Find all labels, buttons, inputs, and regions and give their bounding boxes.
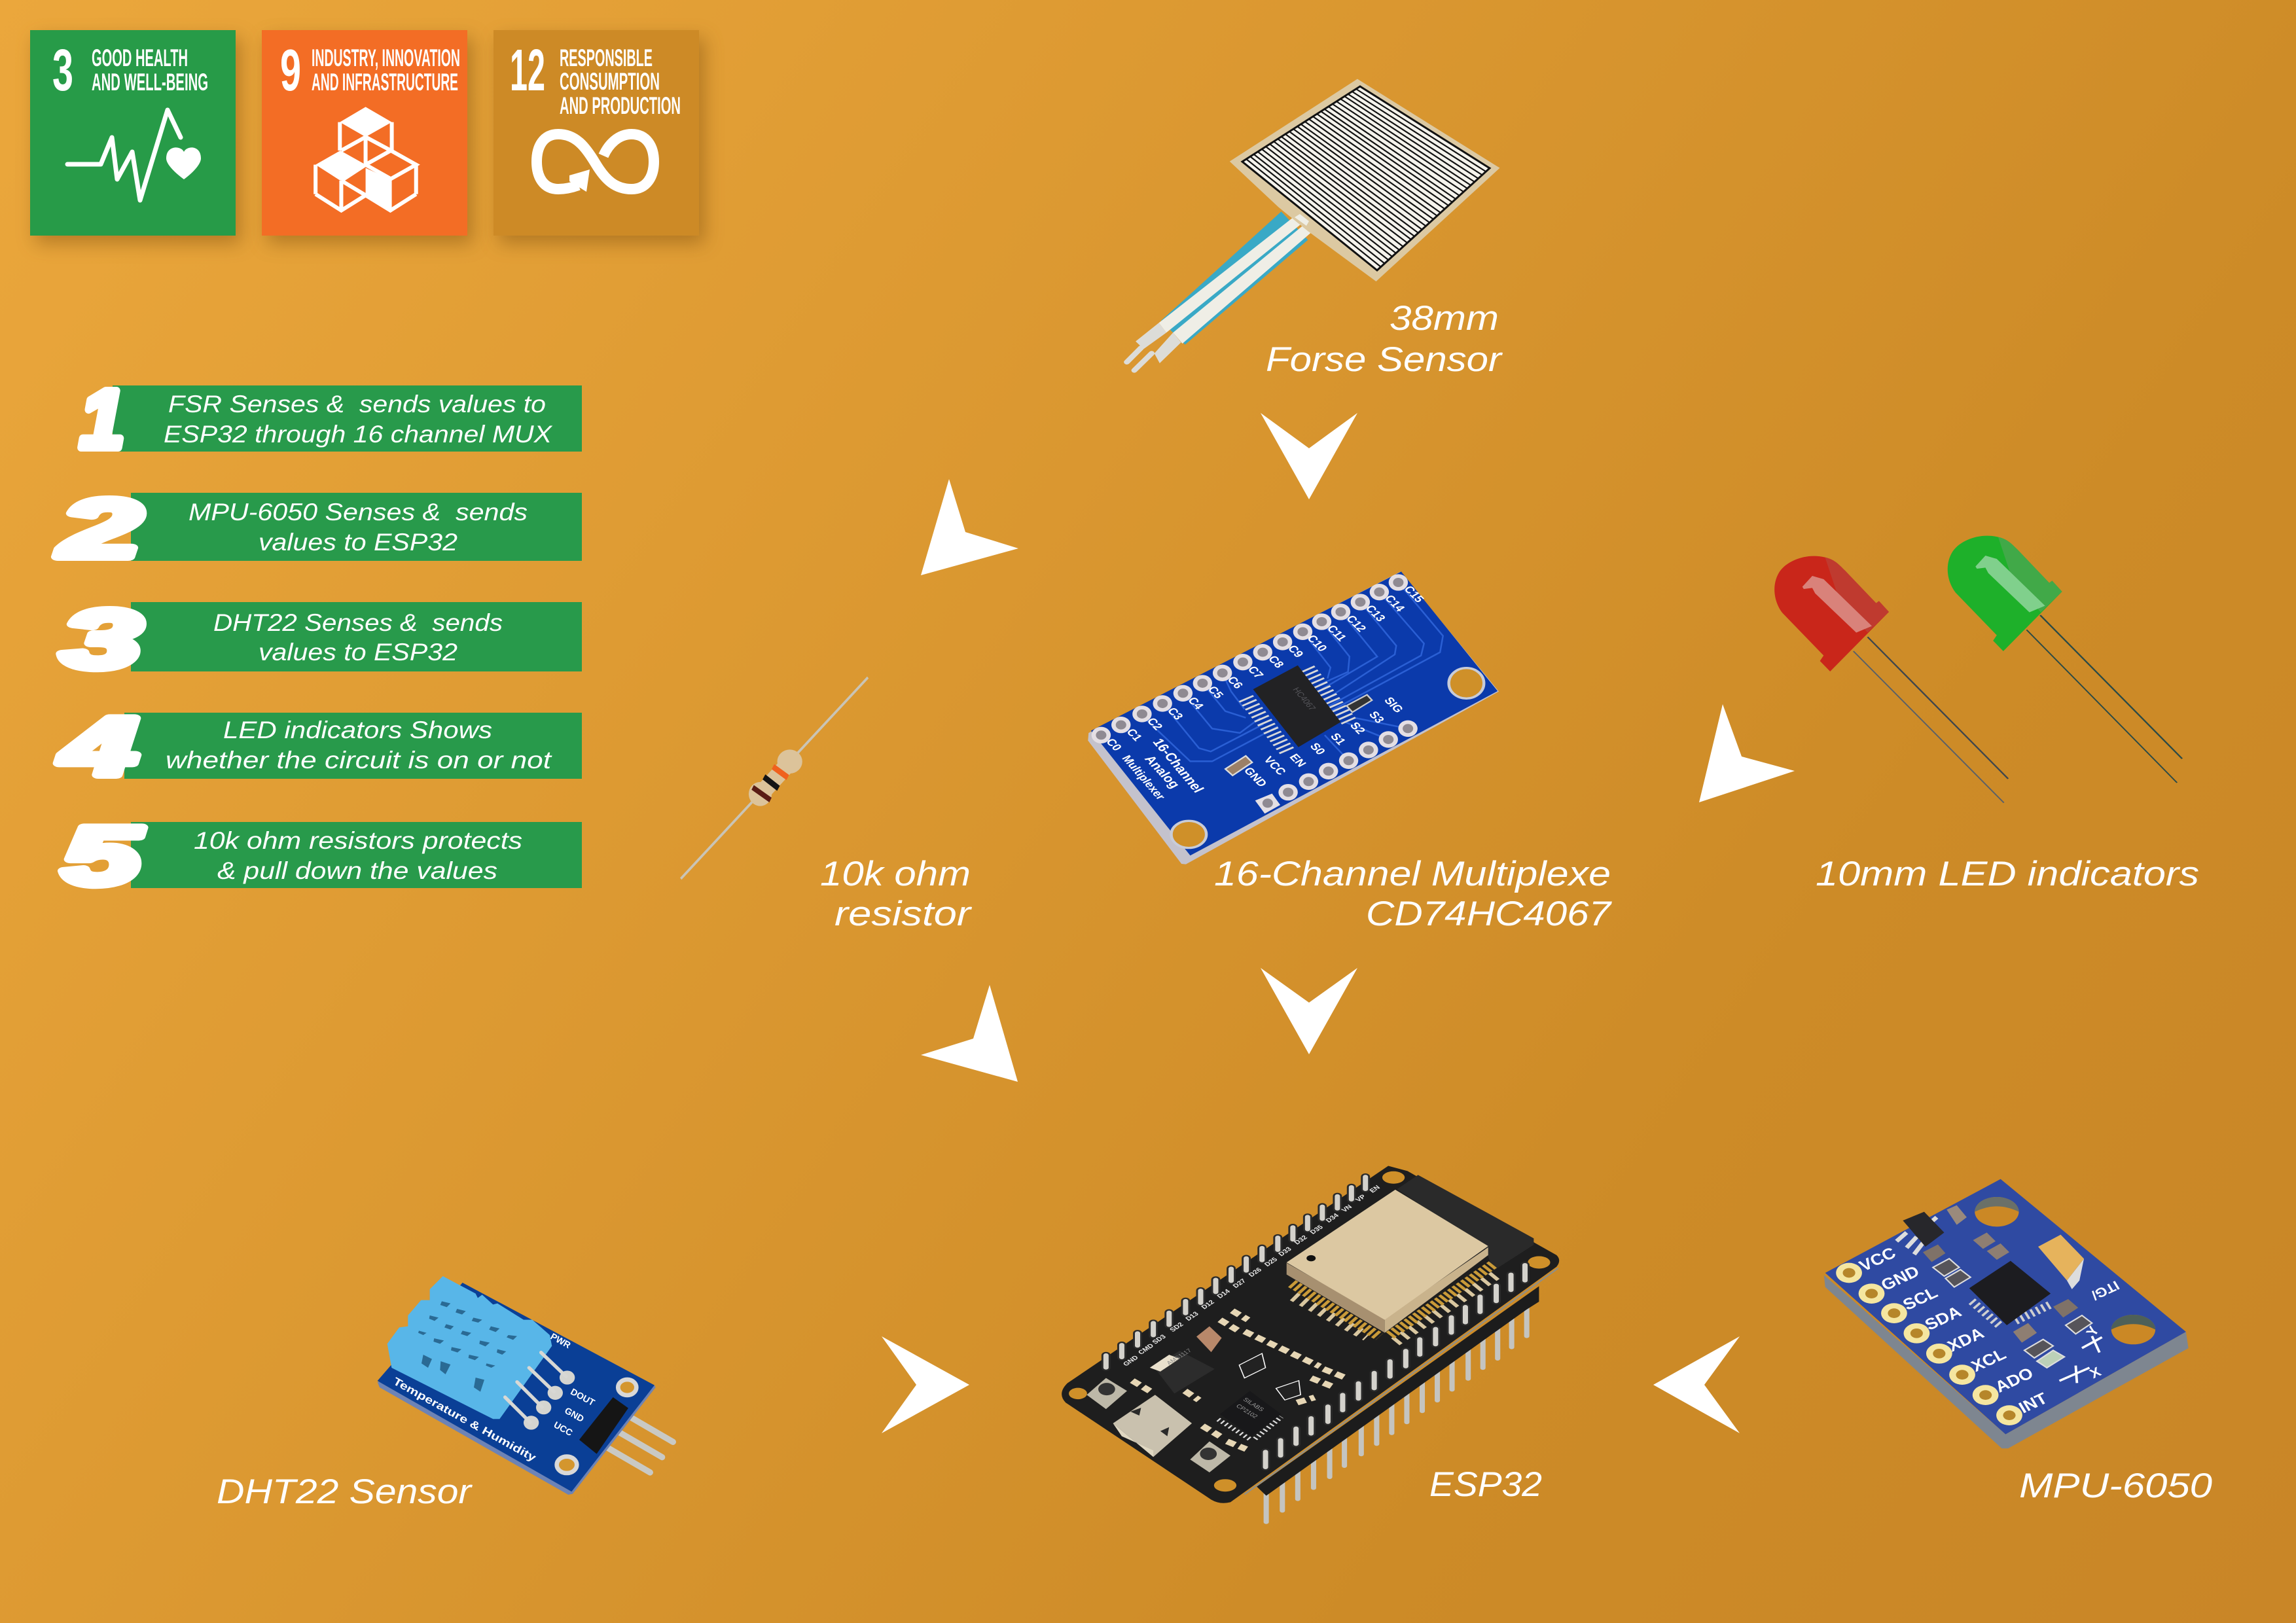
arrow: multiplexer to ESP32 — [1261, 968, 1357, 1054]
SDG 12 title: AND PRODUCTION — [560, 92, 681, 119]
icon: stacked cubes — [315, 107, 416, 211]
voltage regulator: AMS1117 — [1165, 1347, 1193, 1366]
multiplexer silkscreen text: C2 — [1144, 715, 1166, 732]
multiplexer silkscreen text: S1 — [1327, 731, 1349, 747]
capacitors and resistors — [1132, 1311, 1346, 1449]
multiplexer chip — [1246, 666, 1350, 753]
multiplexer silkscreen text — [1103, 584, 1427, 802]
ESP32 silkscreen text: GND — [1122, 1355, 1141, 1368]
ESP32 silkscreen text: D33 — [1278, 1246, 1293, 1258]
multiplexer silkscreen text: C8 — [1265, 654, 1287, 670]
MPU-6050 board image — [1824, 1179, 2189, 1448]
step 5: 10k ohm resistors protects — [194, 827, 522, 854]
DHT22 silkscreen text: GND — [563, 1405, 586, 1424]
arrow: LEDs to multiplexer — [1699, 704, 1795, 802]
LED indicators image — [1774, 536, 2182, 803]
mounting holes — [557, 1380, 636, 1473]
multiplexer chip: HC4067 — [1291, 686, 1318, 712]
multiplexer silkscreen text: Analog — [1141, 753, 1183, 791]
multiplexer silkscreen text: C4 — [1185, 695, 1207, 711]
DHT22 silkscreen text: DOUT — [569, 1386, 597, 1408]
WiFi module shield — [1287, 1190, 1488, 1332]
ESP32 silkscreen text: SD2 — [1169, 1321, 1185, 1334]
header block — [579, 1397, 628, 1454]
USB-UART chip: CP2102 — [1235, 1402, 1259, 1419]
sensor housing — [387, 1276, 552, 1419]
resistor image — [681, 677, 868, 879]
SDG 12 title — [560, 45, 681, 119]
label: resistor: resistor — [834, 895, 973, 933]
label: LED indicators: 10mm LED indicators — [1816, 855, 2199, 893]
SDG 9 number: 9 — [280, 38, 301, 103]
mounting holes — [1069, 1171, 1551, 1491]
step 3: 3 — [62, 593, 141, 685]
label: multiplexer — [1214, 855, 1613, 933]
multiplexer silkscreen text: S3 — [1366, 709, 1388, 725]
label: multiplexer: 16-Channel Multiplexe — [1214, 855, 1611, 893]
ESP32 silkscreen text — [1122, 1185, 1382, 1368]
ESP32 silkscreen text: D25 — [1263, 1257, 1280, 1268]
arrow: resistor to ESP32 — [921, 985, 1018, 1082]
step 3: values to ESP32 — [259, 639, 457, 666]
MPU silkscreen text: XCL — [1968, 1346, 2009, 1376]
step 4: whether the circuit is on or not — [166, 747, 552, 774]
SDG 12 title: CONSUMPTION — [560, 68, 660, 95]
step 4: 4 — [58, 700, 137, 793]
step 1 — [80, 373, 582, 465]
pads — [1836, 1263, 2022, 1425]
step 1: 1 — [80, 373, 124, 465]
tantalum capacitor — [2038, 1235, 2084, 1289]
multiplexer board image — [1088, 571, 1499, 865]
step 4: LED indicators Shows — [223, 717, 492, 743]
component leads and pads — [505, 1353, 575, 1430]
MPU silkscreen text: SCL — [1900, 1284, 1941, 1314]
arrow: force sensor to multiplexer — [1261, 413, 1357, 499]
label: MPU-6050: MPU-6050 — [2019, 1467, 2213, 1505]
regulator — [1897, 1212, 1944, 1255]
SDG 3 title: AND WELL-BEING — [92, 69, 208, 96]
ESP32 silkscreen text: D26 — [1247, 1267, 1264, 1278]
label: multiplexer: CD74HC4067 — [1366, 895, 1613, 933]
ESP32 silkscreen text: CMD — [1137, 1343, 1156, 1356]
MPU silkscreen text: ITG/ — [2089, 1278, 2122, 1302]
ESP32 board image — [1062, 1166, 1559, 1522]
ESP32 silkscreen text: D27 — [1232, 1278, 1248, 1289]
panel: step list — [58, 373, 582, 902]
DHT22 silkscreen text — [391, 1331, 597, 1465]
icon: infinity loop — [537, 134, 654, 192]
step 2: values to ESP32 — [259, 529, 457, 556]
multiplexer silkscreen text: C15 — [1401, 584, 1427, 605]
DHT22 silkscreen text: Temperature & Humidity — [391, 1375, 539, 1465]
red LED — [1774, 556, 2008, 803]
USB connector — [1113, 1395, 1192, 1457]
arrow: multiplexer to resistor — [921, 479, 1018, 575]
mounting holes — [1172, 668, 1484, 848]
step 3: DHT22 Senses & sends — [213, 609, 503, 636]
board — [1062, 1166, 1559, 1503]
ceramic parts — [1923, 1205, 2092, 1368]
ESP32 silkscreen text: SD3 — [1151, 1334, 1168, 1346]
MPU silkscreen text: X — [2087, 1364, 2104, 1382]
SDG 9 title — [312, 45, 460, 96]
MPU silkscreen text: VCC — [1856, 1244, 1899, 1275]
multiplexer silkscreen text: C5 — [1205, 684, 1227, 701]
MPU silkscreen text: ADO — [1992, 1364, 2037, 1396]
force sensor image — [1127, 79, 1499, 370]
ESP32 silkscreen text: EN — [1369, 1185, 1382, 1194]
MPU silkscreen text — [1856, 1244, 2122, 1417]
axis arrows — [2060, 1336, 2102, 1383]
ESP32 silkscreen text: D12 — [1200, 1299, 1216, 1311]
step 2 — [58, 482, 582, 575]
multiplexer silkscreen text: C7 — [1245, 664, 1266, 681]
multiplexer silkscreen text: C14 — [1382, 593, 1408, 614]
label: force sensor — [1266, 299, 1503, 379]
multiplexer silkscreen text: C6 — [1225, 674, 1246, 691]
green LED — [1948, 536, 2182, 783]
small components — [1225, 695, 1372, 776]
label: ESP32: ESP32 — [1429, 1465, 1542, 1504]
header pins — [1266, 1307, 1527, 1522]
step 5: 5 — [63, 810, 142, 902]
step 1: FSR Senses & sends values to — [168, 391, 546, 418]
SDG 12 title: RESPONSIBLE — [560, 45, 653, 71]
SDG 12 number: 12 — [510, 38, 545, 103]
step 5 — [63, 810, 582, 902]
multiplexer silkscreen text: C3 — [1164, 705, 1187, 722]
multiplexer silkscreen text: S0 — [1307, 741, 1329, 757]
multiplexer silkscreen text: C0 — [1103, 736, 1125, 753]
DHT22 silkscreen text: PWR — [549, 1331, 573, 1350]
MPU silkscreen text: GND — [1878, 1263, 1923, 1294]
MPU silkscreen text: Y — [2083, 1324, 2102, 1339]
multiplexer silkscreen text: GND — [1241, 765, 1270, 789]
multiplexer pads — [1092, 574, 1418, 813]
MPU silkscreen text: SDA — [1922, 1303, 1965, 1334]
ESP32 silkscreen text: D34 — [1325, 1213, 1341, 1224]
SDG 3 title: GOOD HEALTH — [92, 45, 188, 71]
multiplexer silkscreen text: VCC — [1261, 754, 1289, 777]
multiplexer silkscreen text: Multiplexer — [1119, 753, 1168, 802]
step 3 — [62, 593, 582, 685]
multiplexer silkscreen text: C9 — [1285, 643, 1306, 660]
multiplexer silkscreen text: 16-Channel — [1149, 736, 1207, 795]
main chip — [1969, 1261, 2051, 1325]
icon: heartbeat and heart — [67, 110, 201, 200]
antenna section — [1397, 1175, 1534, 1271]
step 5: & pull down the values — [217, 857, 497, 884]
step 4 — [58, 700, 582, 793]
label: resistor: 10k ohm — [820, 855, 971, 893]
SDG 9 title: AND INFRASTRUCTURE — [312, 69, 458, 96]
USB-UART chip — [1218, 1391, 1282, 1440]
step 2: MPU-6050 Senses & sends — [188, 499, 528, 526]
panel: SDG 3 good health card — [30, 30, 236, 236]
SDG 9 title: INDUSTRY, INNOVATION — [312, 45, 460, 71]
step 1: ESP32 through 16 channel MUX — [164, 421, 552, 448]
ESP32 silkscreen text: D35 — [1309, 1224, 1325, 1236]
push buttons — [1086, 1378, 1230, 1472]
MPU silkscreen text: XDA — [1945, 1325, 1987, 1355]
multiplexer silkscreen text: EN — [1287, 751, 1309, 769]
multiplexer silkscreen text: C1 — [1124, 726, 1145, 743]
multiplexer silkscreen text: C10 — [1304, 633, 1330, 654]
SDG 3 title — [92, 45, 208, 96]
SDG 3 number: 3 — [52, 38, 73, 103]
DHT22 silkscreen text: UCC — [552, 1419, 575, 1438]
panel: SDG 9 industry card — [262, 30, 467, 236]
label: DHT22 sensor: DHT22 Sensor — [217, 1472, 473, 1511]
panel: SDG 12 responsible consumption card — [493, 30, 699, 236]
label: force sensor: Forse Sensor — [1266, 340, 1503, 379]
mounting holes — [1975, 1197, 2155, 1344]
arrow: MPU-6050 to ESP32 — [1653, 1336, 1740, 1433]
DHT22 sensor image — [378, 1276, 673, 1495]
arrow: DHT22 to ESP32 — [882, 1336, 969, 1433]
USB-UART chip: SILABS — [1242, 1396, 1266, 1412]
MPU silkscreen text: INT — [2016, 1390, 2051, 1417]
multiplexer silkscreen text: S2 — [1347, 720, 1369, 736]
multiplexer silkscreen text: C13 — [1363, 603, 1389, 624]
ESP32 silkscreen text: VP — [1354, 1194, 1368, 1204]
ESP32 silkscreen text: D32 — [1293, 1234, 1309, 1246]
multiplexer silkscreen text: SIG — [1381, 695, 1407, 715]
step 2: 2 — [58, 482, 141, 575]
label: resistor — [820, 855, 973, 933]
ESP32 silkscreen text: D14 — [1216, 1289, 1232, 1300]
label: force sensor: 38mm — [1390, 299, 1499, 338]
ESP32 silkscreen text: VN — [1340, 1204, 1354, 1214]
multiplexer silkscreen text: C12 — [1343, 613, 1369, 634]
voltage regulator — [1150, 1347, 1215, 1393]
ESP32 silkscreen text: D13 — [1185, 1311, 1200, 1323]
solder pins — [1106, 1177, 1525, 1467]
multiplexer silkscreen text: C11 — [1324, 623, 1350, 643]
castellated pads — [1292, 1264, 1499, 1342]
